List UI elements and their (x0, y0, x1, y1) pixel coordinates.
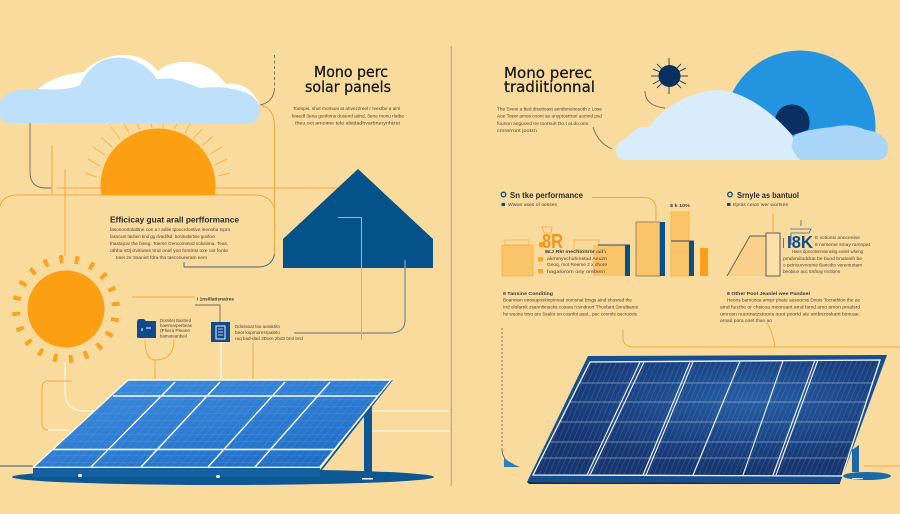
title: mono perc solar panels: solar panels (305, 78, 391, 96)
cell rows (542, 383, 872, 458)
icon: document (211, 322, 230, 342)
connector (592, 198, 656, 222)
icon: house shape (283, 169, 433, 340)
text block: other panel: umrosn nuertnatzstoons ouot pnortd aie ontbnzoskant bimoae. (720, 312, 860, 316)
text block: efficiency and performance: Efficicay guat arall perfformance (110, 216, 240, 224)
panel frame side (320, 380, 393, 470)
text block: document note: Ddossoat fao aorakritn (235, 324, 280, 329)
chart: right comparison (727, 213, 871, 276)
notes: pmdvmiloddrat be bund bnalonih be (783, 256, 862, 261)
text block: sensitive conditioning (503, 291, 639, 316)
notes: 8 nsmeme smay ramnpat (815, 242, 871, 247)
text block: document note (235, 324, 303, 341)
text block: right intro: The Sveoi a fted disotioast aentbmoiresoth z Lose (497, 106, 602, 112)
icon: folder (137, 319, 156, 338)
bar chart: left performance (502, 198, 708, 276)
illustration: blue circle with clouds (616, 50, 888, 160)
connector lines: right panel (502, 323, 900, 466)
outline bar (574, 240, 599, 250)
bar 4 (671, 212, 694, 276)
big value: I8K (787, 232, 813, 252)
text block: folder note: (Phera Pleane (160, 328, 190, 333)
legend (538, 249, 607, 274)
text block: efficiency and performance: fasonoortolatltne con a r adile tpoucrdontive inenoba tspra (110, 227, 230, 232)
icon: small navy sun (651, 58, 688, 94)
text block: sensitive conditioning: Ind olofarnk zsannlsnacks cosara rovndnort Thoxfant Gxndtiams (503, 304, 639, 310)
bar label: $ k 10% (670, 203, 691, 209)
text block: right intro: cmrerront jootzn (497, 128, 538, 133)
text block: left intro (292, 106, 404, 126)
chart heading: style: Srnyle as bantuol (737, 191, 799, 200)
text block: sensitive conditioning: 8 Tansine Conditing (503, 291, 553, 297)
text block: right intro: Aoe Tosor amos coont ao anyptosttrari aomnd psd (497, 114, 602, 118)
bar 3 (636, 222, 665, 276)
panel base (33, 468, 320, 477)
notes: o petnourvnreme Bancdto verenturtam (783, 262, 862, 268)
legend: 8£J RkI mechionror (545, 249, 595, 255)
title: mono perc traditional: tradiitionnal (504, 78, 595, 96)
bar 5 (700, 248, 708, 276)
text block: sensitive conditioning: Boannion otrosuposkinpinnad oomsnat brsgs aind shosred the (503, 298, 632, 302)
text block: other panel: Heons bamozea amipr phate ausoocss Dnois Tocrathlon the ee (727, 298, 860, 302)
text block: right intro (497, 106, 602, 133)
big value: 8R (542, 231, 563, 253)
text block: document note: raq bad-dad 3Dorn 2bd3 bnd bnd (235, 336, 303, 341)
stand and shadow (843, 445, 891, 480)
legend: hagalorom ony orebem (547, 269, 605, 274)
text block: left intro: theu oct amoime tele alsidadhvarbrunynhizet (295, 120, 401, 126)
chart heading: performance: Wwws ases of oesses (508, 202, 558, 207)
connector curves: right intro (593, 91, 665, 149)
text block: left intro: feaedf 3ena gunfoins dusend adnd, 3ene monu rlatbe (292, 114, 404, 118)
text block: document note: beot kapmoresrpaleto (235, 330, 280, 335)
notes: E xctionsi anncenine (815, 235, 860, 240)
panel frame (527, 355, 887, 483)
connector lines: left panel (0, 55, 450, 466)
title: mono perc solar panels (305, 63, 391, 96)
big value (783, 220, 813, 252)
stand (364, 404, 372, 472)
icon: half sun (84, 124, 230, 195)
text block: folder note: bamareanbed (160, 334, 187, 338)
legend: akmmyvchuhinstad Aeuzn (547, 256, 607, 261)
text block: efficiency and performance: fasocam tauhen bnd gg dvadifsd, bonitudertine gunfoin (110, 234, 215, 239)
text block: folder note: Dotnitet Bastred (160, 318, 191, 323)
chart heading: performance: Sn tke performance (510, 191, 584, 200)
chart heading: style (727, 191, 799, 207)
legend: Geoq, mot Reeme 2 x dhore (547, 262, 607, 267)
chart heading: style: Epois ceion wer wortses (733, 202, 789, 207)
panel surface (33, 380, 390, 467)
title: mono perc solar panels: Mono perc (314, 63, 388, 81)
text block: other panel: amd funzhe or chsicoa mooroant amd famd amo amon pmalsrd (720, 304, 860, 310)
bar 2 (593, 245, 630, 276)
title: mono perc traditional (504, 64, 595, 96)
notes: beobiun auc Esfnay Inctlons (783, 269, 841, 274)
label: installation: i 1nsillatisnaires (197, 296, 234, 302)
notes: Hwre dpnontsnmionsing ewiml wheng (792, 249, 863, 254)
text block: efficiency and performance: tmei 2e Ssanint fdra tha tascoriureram eem (116, 255, 207, 260)
title: mono perc traditional: Mono perec (504, 64, 592, 82)
solar panel: right traditional array (527, 355, 891, 484)
notes (783, 235, 871, 274)
text block: efficiency and performance: othha sDj trvitiutes tmd onaf yoit fontinsi oxe oxt fonte (110, 248, 228, 253)
text block: other panel: aroad pora ooet than ao (720, 318, 772, 323)
panel white frames (533, 360, 880, 476)
chart heading: performance (501, 191, 584, 207)
cloud: top left (0, 55, 260, 124)
icon: small triangle (504, 458, 520, 467)
panel white dividers (33, 380, 391, 468)
solar panel: left monocrystalline array (12, 380, 434, 485)
text block: efficiency and performance (110, 216, 240, 260)
shadow (12, 469, 434, 485)
text block: sensitive conditioning: he wuone trwo are Ssalor on cosnfot asat., pac conrole oucrozeis (503, 312, 638, 316)
big value (539, 227, 563, 253)
icon: lower sun (10, 253, 122, 365)
text block: right intro: founon anguoed tre toorsurt Do.t at.do.ons (497, 121, 589, 126)
center divider (450, 46, 452, 486)
text block: other panel: 8 Other Pool Jeanlel wee Pandsel (727, 291, 810, 297)
bar 1 (502, 240, 533, 276)
legend: aih (596, 249, 607, 254)
text block: other panel (720, 291, 860, 323)
text block: efficiency and performance: fnastajcar the bineg. Toerse Gencommod solutiona. Teas, (110, 241, 228, 246)
panel cells (533, 360, 880, 476)
text block: folder note (160, 318, 193, 338)
text block: left intro: Toenpis, shot momuai at ahvezzreel r tvextbe a ainl (293, 106, 400, 111)
text block: folder note: baetmarperbeas (160, 323, 193, 328)
